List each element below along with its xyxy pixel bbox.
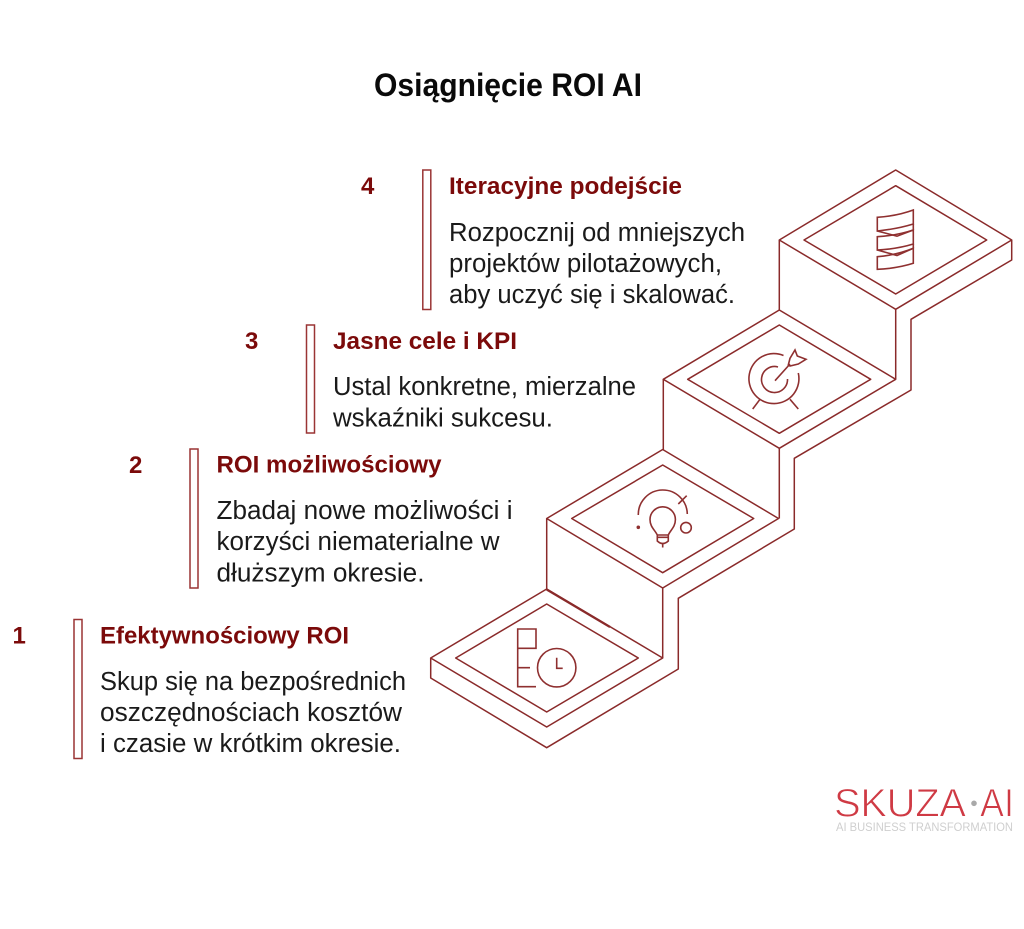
step 4 body <box>449 219 745 309</box>
logo wordmark suffix: AI <box>980 782 1014 826</box>
step 2 body: dłuższym okresie. <box>216 560 424 588</box>
step 3 heading: Jasne cele i KPI <box>333 328 517 355</box>
step 4 heading: Iteracyjne podejście <box>449 173 682 200</box>
isometric staircase <box>431 170 1012 748</box>
step 4 bar <box>423 170 431 310</box>
logo wordmark: SKUZA <box>834 782 966 826</box>
step 2 body: korzyści niematerialne w <box>216 528 500 556</box>
title: Osiągnięcie ROI AI <box>374 67 642 103</box>
step 3 platform <box>663 310 896 518</box>
step 1 body <box>100 668 406 758</box>
step 1 bar <box>74 620 82 758</box>
step 1 body: oszczędnościach kosztów <box>100 699 403 727</box>
panel: step 3 text <box>245 325 636 433</box>
step 1 heading: Efektywnościowy ROI <box>100 622 349 650</box>
icon: light bulb <box>637 490 691 548</box>
step 4 platform <box>779 170 1012 379</box>
panel: step 2 text <box>129 449 512 588</box>
step 3 body: Ustal konkretne, mierzalne <box>333 373 636 401</box>
step 1 platform <box>431 589 663 727</box>
step 2 platform <box>547 450 778 658</box>
icon: stacked ribbon <box>877 210 913 269</box>
step 4 body: Rozpocznij od mniejszych <box>449 219 745 247</box>
step 1 body: i czasie w krótkim okresie. <box>100 730 401 758</box>
staircase outer edge <box>431 240 1012 748</box>
icon: process boxes and clock <box>518 629 576 687</box>
panel: step 4 text <box>361 170 745 310</box>
step 4 body: projektów pilotażowych, <box>449 250 722 278</box>
step 2 body <box>216 497 512 588</box>
step 4 body: aby uczyć się i skalować. <box>449 281 735 309</box>
step 2 body: Zbadaj nowe możliwości i <box>216 497 512 525</box>
step 4 number: 4 <box>361 173 375 200</box>
panel: step 1 text <box>12 620 406 758</box>
step 2 heading: ROI możliwościowy <box>216 452 442 478</box>
step 1 body: Skup się na bezpośrednich <box>100 668 406 696</box>
step 3 body <box>332 373 636 432</box>
step 3 bar <box>306 325 314 433</box>
step 1 number: 1 <box>12 622 26 650</box>
step 2 bar <box>190 449 198 588</box>
logo <box>834 782 1014 834</box>
icon: target with arrow <box>749 350 806 409</box>
step 3 number: 3 <box>245 328 258 355</box>
step 2 number: 2 <box>129 452 142 479</box>
logo tagline: AI BUSINESS TRANSFORMATION <box>836 820 1013 834</box>
logo dot <box>971 800 977 806</box>
step 3 body: wskaźniki sukcesu. <box>332 404 553 432</box>
